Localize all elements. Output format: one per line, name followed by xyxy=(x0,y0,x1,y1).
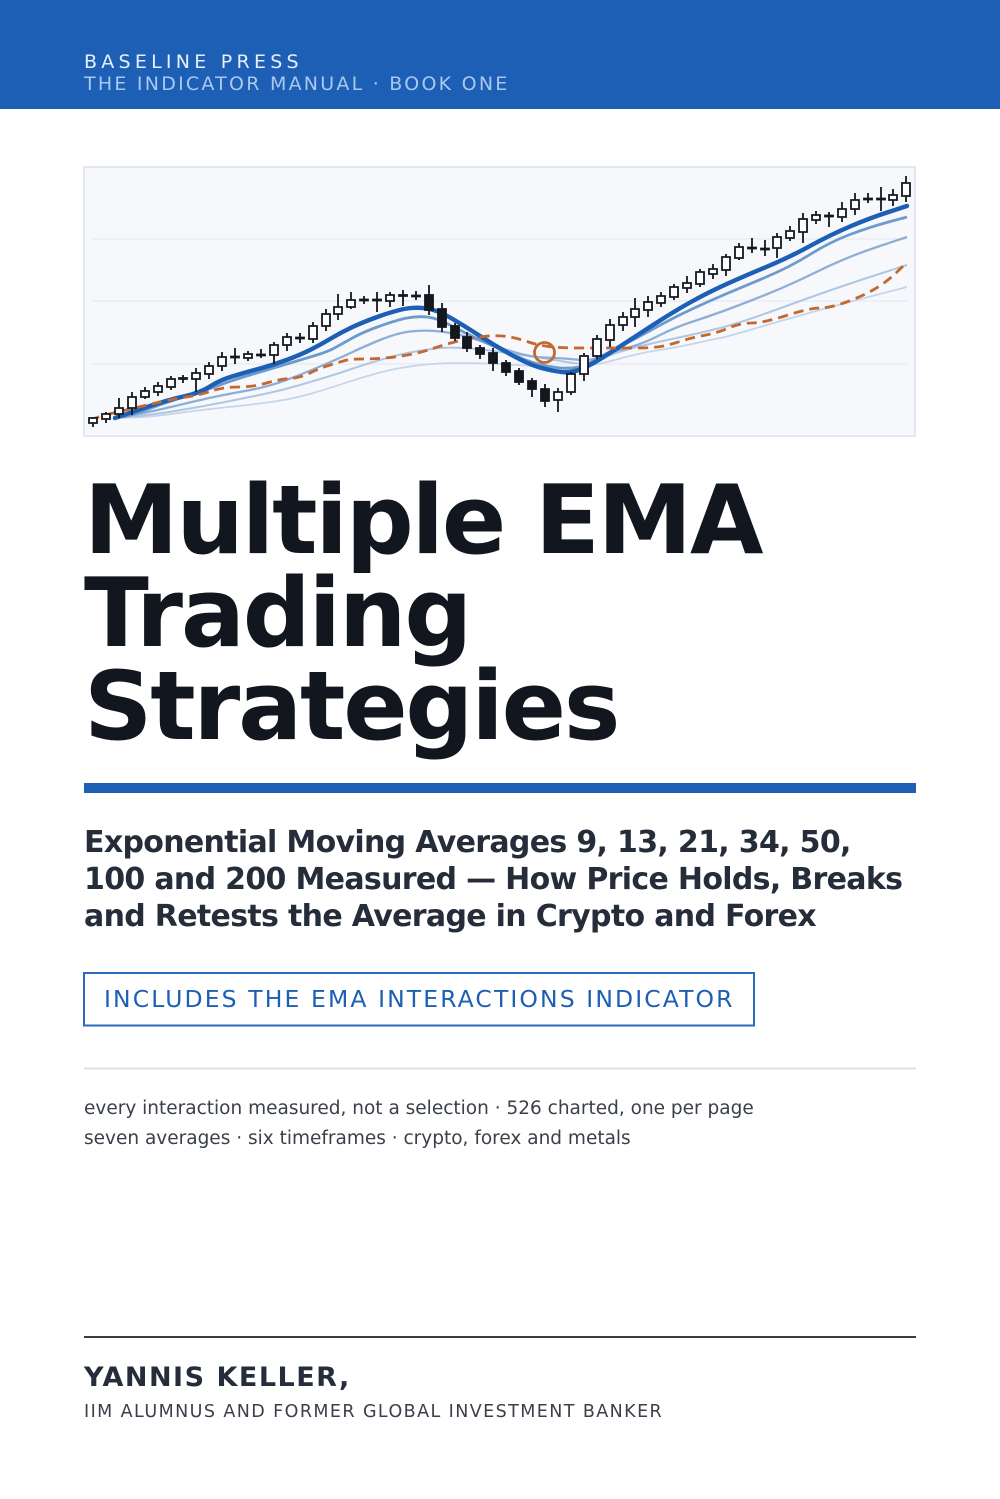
EMA line: main thick blue xyxy=(115,206,907,418)
title: Strategies xyxy=(84,652,618,762)
candlesticks xyxy=(89,176,910,427)
author credentials: IIM ALUMNUS AND FORMER GLOBAL INVESTMENT BANKER xyxy=(84,1402,663,1422)
EMA line: second xyxy=(115,217,907,418)
divider xyxy=(84,1068,916,1070)
details text xyxy=(84,1098,754,1149)
badge: INCLUDES THE EMA INTERACTIONS INDICATOR xyxy=(104,985,735,1013)
EMA line: lightest xyxy=(115,287,907,418)
title xyxy=(84,466,764,762)
subtitle: and Retests the Average in Crypto and Forex xyxy=(84,899,816,934)
EMA line: medium xyxy=(115,237,907,418)
retest circle marker xyxy=(534,342,554,362)
EMA line: light xyxy=(115,265,907,418)
author name: YANNIS KELLER, xyxy=(83,1362,351,1393)
series line: THE INDICATOR MANUAL · BOOK ONE xyxy=(83,73,510,95)
chart panel xyxy=(84,167,915,436)
subtitle: Exponential Moving Averages 9, 13, 21, 34, 50, xyxy=(84,825,851,860)
header band xyxy=(0,0,1000,109)
title: Trading xyxy=(84,559,470,669)
title: Multiple EMA xyxy=(84,466,764,576)
badge xyxy=(84,973,754,1026)
author rule xyxy=(84,1336,916,1338)
subtitle: 100 and 200 Measured — How Price Holds, Breaks xyxy=(84,862,902,897)
subtitle xyxy=(84,825,902,934)
details text: every interaction measured, not a selection · 526 charted, one per page xyxy=(84,1098,754,1119)
details text: seven averages · six timeframes · crypto, forex and metals xyxy=(84,1128,631,1149)
EMA line: orange dashed 200 xyxy=(90,262,907,420)
publisher name: BASELINE PRESS xyxy=(84,51,303,73)
blue rule xyxy=(84,783,916,793)
